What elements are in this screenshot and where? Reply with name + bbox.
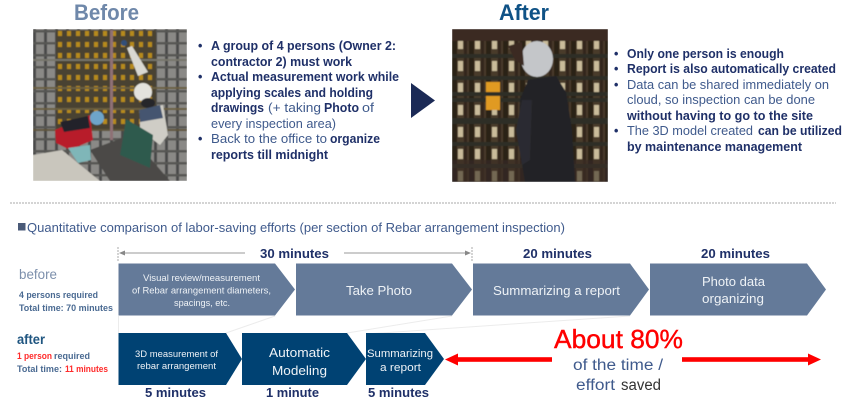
step: visual review: Visual review/measurement xyxy=(143,273,260,284)
bullet list: after: Only one person is enough xyxy=(627,47,784,61)
bracket: 30 minutes span: 30 minutes xyxy=(260,246,329,261)
duration label: photo organizing 20 minutes: 20 minutes xyxy=(701,246,770,261)
callout: about 80% saved: of the time / xyxy=(573,357,664,374)
step: summarizing a report xyxy=(366,333,444,385)
callout: about 80% saved: saved xyxy=(621,377,661,394)
row label: after: required xyxy=(54,351,90,361)
bullet list: after: cloud, so inspection can be done xyxy=(627,93,815,107)
step: 3D measurement: 3D measurement of xyxy=(135,349,218,360)
bullet list: before: reports till midnight xyxy=(211,148,329,162)
step: automatic modeling xyxy=(242,333,366,385)
row label: before xyxy=(19,267,113,313)
step: visual review: of Rebar arrangement diameters, xyxy=(132,286,271,296)
step: photo data organizing: organizing xyxy=(702,291,764,306)
step: take photo: Take Photo xyxy=(346,283,412,298)
heading: Before: Before xyxy=(74,0,139,25)
bullet list: before: drawings xyxy=(211,101,264,115)
row label: after xyxy=(17,332,108,374)
bullet list: after: Data can be shared immediately on xyxy=(627,78,829,92)
photo: workers measuring rebar by hand xyxy=(33,29,187,181)
step: automatic modeling: Automatic xyxy=(269,345,331,360)
process: after workflow xyxy=(118,333,444,385)
bullet list: before: of xyxy=(362,101,375,115)
step: summarizing a report: Summarizing a report xyxy=(493,283,620,298)
row label: before: before xyxy=(19,267,57,282)
row label: after: 1 person xyxy=(17,351,52,361)
bullet list: before: contractor 2) must work xyxy=(211,55,352,69)
duration label: summarizing 20 minutes: 20 minutes xyxy=(523,246,592,261)
bullet list: after: • xyxy=(614,78,618,92)
step: take photo xyxy=(296,264,472,316)
photo: single inspector wearing headset xyxy=(452,29,608,182)
bullet list: before: • xyxy=(198,39,202,53)
bullet list: before: applying scales and holding xyxy=(211,86,373,100)
duration label: 5 minutes: 5 minutes xyxy=(368,385,429,400)
callout: about 80% saved: effort xyxy=(576,377,616,394)
row label: after: 11 minutes xyxy=(65,364,108,374)
bullet list: before: Photo xyxy=(324,101,359,115)
step: photo data organizing: Photo data xyxy=(702,274,766,289)
arrow: red left xyxy=(445,354,552,366)
bullet list: after: by maintenance management xyxy=(627,140,803,154)
bullet list: before: every inspection area) xyxy=(211,117,336,131)
bullet list: before: Actual measurement work while xyxy=(211,70,399,84)
duration label: 1 minute: 1 minute xyxy=(266,385,319,400)
bullet list: after: The 3D model created xyxy=(627,124,753,138)
step: photo data organizing xyxy=(650,264,826,316)
heading: After: After xyxy=(499,0,549,25)
step: visual review: spacings, etc. xyxy=(174,298,230,309)
callout: about 80% saved xyxy=(554,324,683,394)
step: summarizing a report xyxy=(473,264,649,316)
arrow: before to after xyxy=(411,83,435,118)
process: before workflow xyxy=(118,264,826,316)
step: automatic modeling: Modeling xyxy=(272,363,327,378)
bullet list: before: • xyxy=(198,70,202,84)
bullet list: before: • xyxy=(198,132,202,146)
section heading: quantitative comparison: Quantitative comparison of labor-saving efforts (per section of Rebar arrangement inspection) xyxy=(27,220,565,235)
bullet list: before: organize xyxy=(330,132,380,146)
callout: about 80% saved: About 80% xyxy=(554,324,683,354)
step: visual review xyxy=(118,264,295,316)
step: 3D measurement xyxy=(118,333,242,385)
bullet list: before: Back to the office to xyxy=(211,132,327,146)
bullet list: after: Report is also automatically created xyxy=(627,62,836,76)
bullet list: before: A group of 4 persons (Owner 2: xyxy=(211,39,396,53)
bullet list: after: • xyxy=(614,47,618,61)
step: summarizing a report: a report xyxy=(380,362,421,374)
arrow: red right xyxy=(682,354,821,366)
row label: after: after xyxy=(17,332,46,347)
step: 3D measurement: rebar arrangement xyxy=(137,361,216,372)
bullet list: after: without having to go to the site xyxy=(626,109,813,123)
bullet list: after: • xyxy=(614,62,618,76)
row label: after: Total time: xyxy=(17,364,62,374)
bullet list: after xyxy=(614,47,842,154)
duration label: 5 minutes: 5 minutes xyxy=(145,385,206,400)
bullet list: before xyxy=(198,39,399,162)
step: summarizing a report: Summarizing xyxy=(367,348,433,360)
bullet list: after: can be utilized xyxy=(758,124,842,138)
bullet list: after: • xyxy=(614,124,618,138)
row label: before: 4 persons required xyxy=(19,290,98,300)
row label: before: Total time: 70 minutes xyxy=(19,303,113,313)
bullet list: before: (+ taking xyxy=(268,101,321,115)
bracket: 30 minutes span xyxy=(118,246,472,261)
